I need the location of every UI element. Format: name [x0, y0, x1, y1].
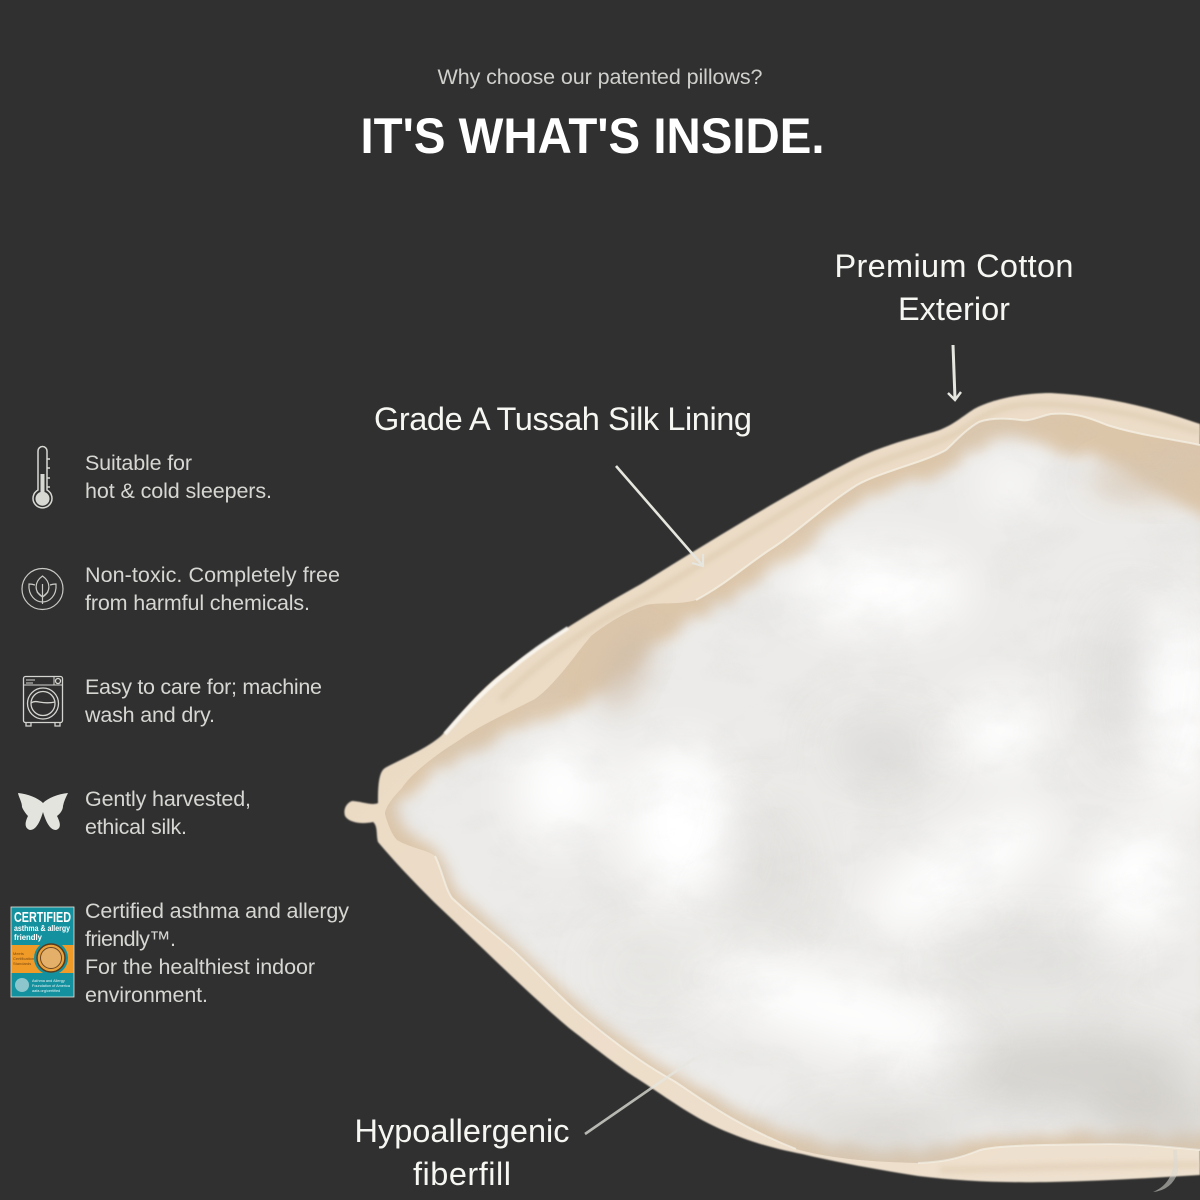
lining inner seam [435, 414, 1200, 1163]
benefit text [85, 563, 340, 615]
benefit text: friendly™. [85, 927, 176, 951]
arrow: cotton exterior [948, 345, 961, 400]
arrow: silk lining [616, 466, 703, 566]
tan tone patches [1090, 458, 1200, 502]
icon: certified badge: Foundation of America [32, 984, 71, 988]
benefit text [85, 451, 272, 503]
benefit text: Easy to care for; machine [85, 675, 322, 699]
icon: certified badge: Standards [13, 961, 31, 966]
silk shell fold shading [500, 404, 1200, 1170]
soft shadows [738, 629, 1200, 1150]
icon: washing machine [24, 676, 62, 726]
icon: thermometer [33, 446, 52, 508]
icon: certified badge [11, 907, 74, 997]
benefit: easy care [24, 675, 322, 727]
benefit text: environment. [85, 983, 208, 1007]
subtitle: Why choose our patented pillows? [438, 65, 763, 89]
icon: certified badge: CERTIFIED [14, 909, 71, 926]
silk lining [385, 414, 1200, 1163]
pillow outer cotton shell [344, 393, 1200, 1182]
icon: leaf in circle [22, 568, 63, 610]
benefit text: Non-toxic. Completely free [85, 563, 340, 587]
icon: certified badge: aafa.org/certified [32, 989, 60, 993]
label: premium cotton exterior [834, 248, 1074, 327]
icon: certified badge: friendly [14, 933, 43, 942]
benefit: certified [11, 899, 349, 1007]
icon: butterfly [18, 793, 68, 830]
benefit text: For the healthiest indoor [85, 955, 315, 979]
hypoallergenic fiberfill [380, 400, 1200, 1180]
benefit text: from harmful chemicals. [85, 591, 310, 615]
shell white edge [445, 628, 568, 734]
benefit text: ethical silk. [85, 815, 187, 839]
label: silk lining: Grade A Tussah Silk Lining [374, 401, 752, 437]
benefit: temperature [33, 446, 272, 508]
arrow: fiberfill line [585, 1058, 695, 1134]
label: premium cotton exterior: Exterior [898, 291, 1010, 327]
label: fiberfill [354, 1113, 570, 1192]
icon: certified badge: Meets [13, 951, 24, 956]
benefit: non-toxic [22, 563, 340, 615]
benefit text: wash and dry. [84, 703, 215, 727]
bright highlights [515, 460, 1200, 1080]
benefit text: Gently harvested, [85, 787, 251, 811]
label: fiberfill: fiberfill [413, 1156, 511, 1192]
label: premium cotton exterior: Premium Cotton [834, 248, 1074, 284]
icon: certified badge: Certification [13, 956, 34, 961]
label: fiberfill: Hypoallergenic [354, 1113, 570, 1149]
benefit text: Suitable for [85, 451, 192, 475]
pillow cross-section [344, 393, 1200, 1192]
benefit text [84, 675, 322, 727]
watermark swoosh [1153, 1150, 1178, 1192]
benefit: ethical silk [18, 787, 251, 839]
icon: certified badge: Asthma and Allergy [32, 979, 65, 983]
title: IT'S WHAT'S INSIDE. [360, 108, 824, 164]
benefit text: Certified asthma and allergy [85, 899, 349, 923]
benefit text [85, 787, 251, 839]
benefit text: hot & cold sleepers. [85, 479, 272, 503]
benefit text [85, 899, 349, 1007]
icon: certified badge: asthma & allergy [14, 924, 70, 933]
